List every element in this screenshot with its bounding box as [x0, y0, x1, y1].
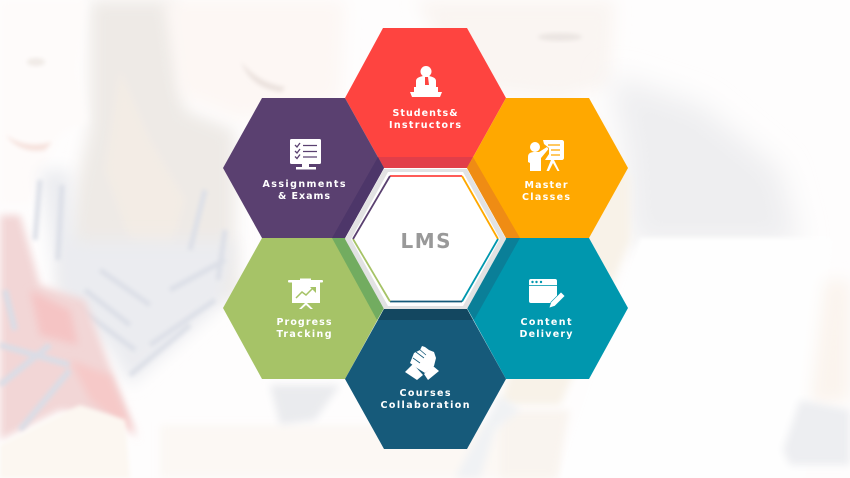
LMS title: LMS: [400, 229, 450, 253]
outer grey ring: [345, 169, 506, 309]
icon: teacher at board: [528, 140, 564, 171]
label: Progress Tracking: [276, 317, 332, 340]
label: Students& Instructors: Instructors: [389, 120, 461, 131]
red hexagon: [345, 28, 506, 168]
teal hexagon: [467, 238, 628, 379]
hand and watch at right edge: [810, 280, 850, 405]
icon: clasped hands: [405, 346, 439, 380]
label: Content Delivery: Delivery: [520, 329, 573, 340]
neck and skin strip behind teal: [500, 110, 630, 405]
label: Courses Collaboration: [380, 388, 470, 411]
purple hexagon inner shadow: [332, 157, 384, 238]
hexagon panel: Assignments & Exams: [223, 98, 384, 238]
man on left face: [0, 0, 87, 205]
icon: speaker at podium: [410, 66, 442, 97]
label: Assignments & Exams: [262, 179, 346, 202]
navy hexagon inner shadow: [378, 309, 473, 320]
purple hexagon: [223, 98, 384, 238]
man on right face: [415, 0, 615, 100]
label: Master Classes: Classes: [522, 192, 570, 203]
label: Content Delivery: [520, 317, 573, 340]
center hexagon: LMS: [345, 169, 506, 309]
icon: presentation board with chart: [288, 278, 323, 309]
woman's striped shirt: [40, 170, 235, 385]
laptop: [560, 238, 832, 478]
woman's hair: [60, 0, 240, 300]
label: Assignments & Exams: & Exams: [278, 191, 330, 202]
orange hexagon: [467, 98, 628, 238]
man's sweater: [610, 75, 800, 245]
green hexagon inner shadow: [332, 238, 384, 320]
navy hexagon: [345, 309, 506, 449]
label: Progress Tracking: Progress: [276, 317, 332, 328]
hexagon panel: Master Classes: [467, 98, 628, 238]
label: Courses Collaboration: Courses: [400, 388, 451, 399]
icon: checklist monitor: [290, 139, 321, 170]
label: Progress Tracking: Tracking: [276, 329, 332, 340]
hexagon panel: Progress Tracking: [223, 238, 384, 379]
label: Assignments & Exams: Assignments: [262, 179, 346, 190]
label: Content Delivery: Content: [520, 317, 572, 328]
label: Students& Instructors: [389, 108, 461, 131]
label: Students& Instructors: Students&: [392, 108, 458, 119]
label: Courses Collaboration: Collaboration: [380, 400, 470, 411]
hexagon panel: Content Delivery: [467, 238, 628, 379]
multi-coloured inner outline: [353, 176, 498, 302]
hexagon panel: Courses Collaboration: [345, 309, 506, 449]
label: Master Classes: Master: [524, 180, 568, 191]
forearm and table: [0, 405, 130, 478]
hexagon panel: Students & Instructors: [345, 28, 506, 168]
woman's face: [165, 0, 345, 120]
icon: browser window and pencil: [529, 279, 565, 308]
plaid shirt: [0, 215, 138, 440]
teal hexagon inner shadow: [467, 238, 520, 320]
label: Master Classes: [522, 180, 570, 203]
red hexagon inner shadow: [378, 157, 473, 168]
green hexagon: [223, 238, 384, 379]
white interior: [351, 172, 500, 306]
orange hexagon inner shadow: [467, 157, 520, 238]
